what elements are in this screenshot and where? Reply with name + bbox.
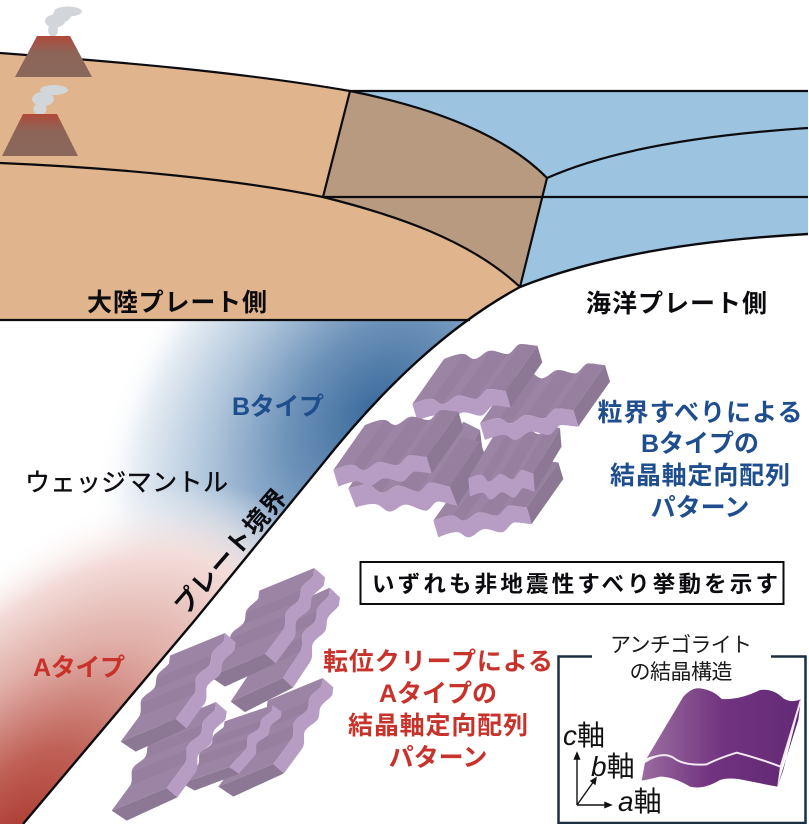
label: A type: Aタイプ (33, 654, 125, 682)
sheet: lower left (112, 702, 227, 821)
callout: B type pattern text: 結晶軸定向配列 (610, 462, 790, 490)
sheet: lower right (433, 461, 563, 537)
panel title: の結晶構造 (630, 661, 732, 684)
sheet: bottom middle (182, 705, 282, 791)
label: wedge mantle: ウェッジマントル (25, 469, 228, 497)
panel title: アンチゴライト (610, 634, 752, 657)
sheet: upper left (412, 344, 542, 421)
sheet: lower left extension (430, 422, 483, 503)
sheet: top right (210, 568, 325, 687)
heading: oceanic plate side: 海洋プレート側 (586, 290, 767, 318)
callout: A type pattern text: 転位クリープによる (323, 648, 553, 676)
plate outlines (0, 53, 808, 320)
callout: aseismic slip box: いずれも非地震性すべり挙動を示す (372, 572, 778, 597)
sheet: bottom right (218, 678, 333, 797)
callout: A type pattern text: Aタイプの (379, 680, 497, 708)
sheet: middle left (333, 410, 463, 487)
plate overlap zone (323, 91, 547, 287)
panel title (610, 634, 752, 684)
panel frame (558, 656, 806, 823)
sheet: far right (231, 588, 340, 712)
icon: lower volcano (2, 85, 78, 156)
sheet: middle right (466, 414, 564, 509)
callout: A type pattern text: パターン (389, 744, 487, 772)
axis label c: c軸 (563, 720, 605, 751)
label: B type: Bタイプ (232, 393, 324, 421)
axis arrows (574, 753, 611, 808)
callout: A type pattern text: 結晶軸定向配列 (348, 712, 528, 740)
continental plate (0, 53, 547, 320)
callout: aseismic slip box (360, 562, 784, 604)
axis label b: b軸 (591, 751, 635, 782)
heading: continental plate side: 大陸プレート側 (87, 289, 267, 317)
oceanic plate water layers (350, 91, 808, 287)
icon: upper volcano (15, 6, 92, 77)
callout: A type pattern text (323, 648, 553, 772)
wedge mantle gradient (0, 320, 471, 824)
callout: B type pattern text (598, 399, 802, 522)
axis label a: a軸 (618, 786, 662, 817)
crystal pattern: B type (333, 344, 610, 537)
callout: B type pattern text: Bタイプの (641, 430, 759, 458)
sheet: lower left (342, 422, 494, 525)
plate boundary line (23, 234, 808, 824)
sheet: upper right (480, 363, 610, 440)
label: plate boundary: プレート境界 (169, 484, 293, 620)
crystal pattern: A type (112, 568, 340, 821)
sheet: upper left (121, 633, 236, 752)
callout: B type pattern text: パターン (651, 494, 749, 522)
crystal sheet (642, 688, 801, 787)
panel: antigorite crystal structure (558, 634, 806, 823)
callout: B type pattern text: 粒界すべりによる (598, 399, 802, 427)
